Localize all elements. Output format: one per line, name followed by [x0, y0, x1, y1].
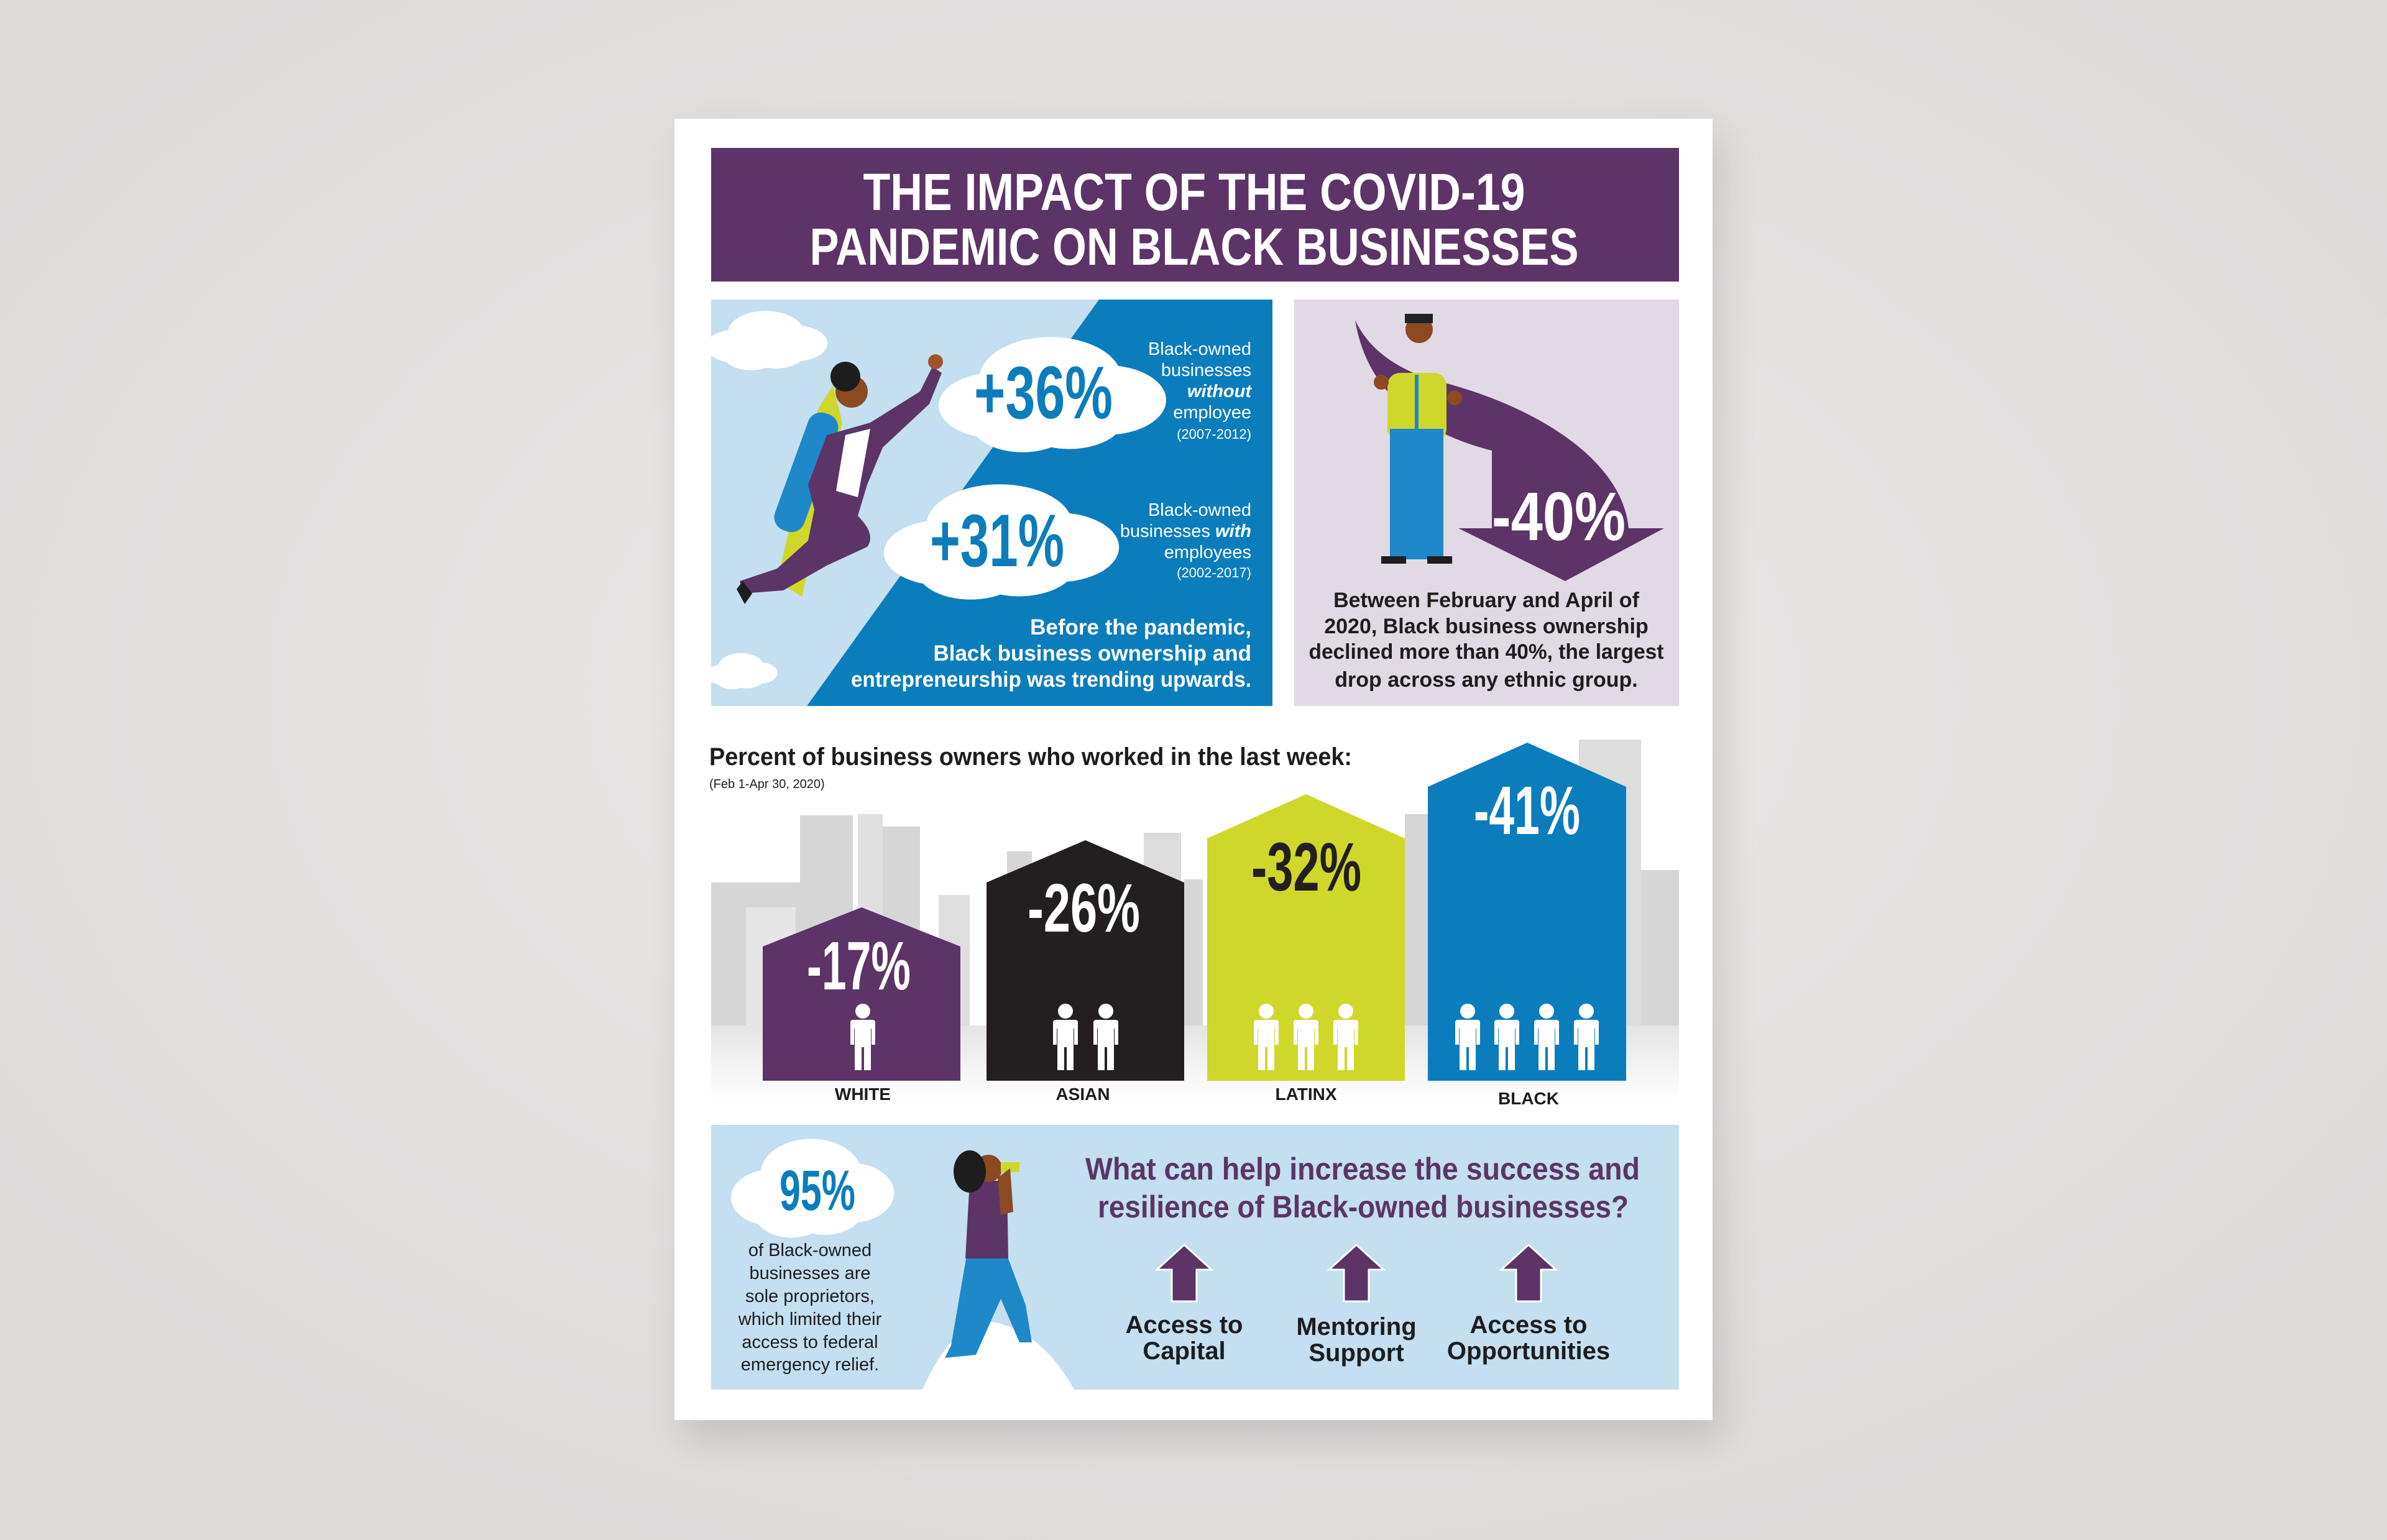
callout: +36% cloud [939, 337, 1166, 452]
chart heading: Percent of business owners who worked in the last week: [709, 743, 1352, 771]
bar: latinx -32% [1207, 794, 1405, 1104]
arrow: mentoring support: Mentoring [1296, 1313, 1417, 1341]
text: with employees: (2002-2017) [1177, 565, 1251, 580]
arrow: access to opportunities: Access to [1470, 1311, 1587, 1339]
panel: solutions [711, 1125, 1679, 1390]
card shadow [684, 134, 1722, 1439]
bar: black -41%: BLACK [1498, 1089, 1559, 1108]
text: before the pandemic: Black business ownership and [933, 641, 1251, 666]
callout: +31% cloud: +31% [930, 499, 1064, 582]
text: decline description: Between February and April of [1333, 589, 1640, 612]
text: without employee: without [1187, 382, 1252, 401]
chart heading: (Feb 1-Apr 30, 2020) [709, 777, 825, 791]
text: decline description: declined more than 40%, the largest [1309, 640, 1663, 664]
text: without employee: businesses [1161, 360, 1251, 380]
text: before the pandemic: Before the pandemic, [1030, 615, 1251, 639]
icon: small clouds [706, 311, 827, 689]
chart heading [709, 743, 1352, 791]
text: sole proprietors [738, 1240, 882, 1375]
text: before the pandemic [851, 615, 1251, 692]
arrow: access to opportunities: Opportunities [1447, 1337, 1610, 1365]
callout: +36% cloud: +36% [974, 351, 1113, 434]
arrow: access to capital: Capital [1143, 1337, 1226, 1365]
text: without employee [1148, 339, 1252, 442]
heading: question: What can help increase the success and [1085, 1152, 1640, 1186]
bar: white -17% [763, 907, 960, 1104]
arrow: access to capital: Access to [1126, 1311, 1243, 1339]
bar: white -17%: -17% [807, 928, 911, 1004]
title banner [711, 148, 1679, 282]
arrow: mentoring support: Support [1308, 1339, 1404, 1367]
text: decline description [1309, 589, 1663, 692]
callout: 95% cloud: 95% [780, 1159, 855, 1222]
text: sole proprietors: sole proprietors, [745, 1286, 875, 1306]
bar: latinx -32%: -32% [1251, 829, 1361, 905]
arrow: mentoring support [1296, 1245, 1417, 1367]
skyline background [711, 740, 1679, 1052]
panel: pre-pandemic growth [706, 300, 1272, 706]
text: with employees: Black-owned [1148, 500, 1251, 520]
text: with employees: businesses with [1120, 521, 1251, 541]
title banner: PANDEMIC ON BLACK BUSINESSES [809, 218, 1579, 276]
arrow: access to capital [1126, 1245, 1243, 1365]
bar: white -17%: WHITE [835, 1084, 891, 1104]
chart: house bars [711, 740, 1679, 1108]
illustration: jetpack woman [737, 354, 943, 604]
text: sole proprietors: of Black-owned [748, 1240, 872, 1260]
title banner: THE IMPACT OF THE COVID-19 [863, 163, 1525, 221]
text: with employees: employees [1164, 543, 1251, 562]
text: sole proprietors: emergency relief. [741, 1355, 879, 1375]
text: without employee: employee [1173, 403, 1251, 423]
illustration: man with downward arrow [1355, 314, 1664, 581]
text: decline description: drop across any ethnic group. [1335, 668, 1638, 692]
heading: question: resilience of Black-owned businesses? [1098, 1189, 1629, 1224]
text: decline description: 2020, Black business ownership [1324, 615, 1649, 638]
illustration: woman with binoculars on hill [922, 1150, 1074, 1390]
text: sole proprietors: which limited their [738, 1309, 882, 1329]
heading: question [1085, 1152, 1640, 1224]
text: sole proprietors: businesses are [749, 1263, 871, 1283]
bar: asian -26% [987, 840, 1184, 1104]
bar: black -41%: -41% [1474, 772, 1580, 849]
panel: -40% decline: -40% [1492, 479, 1626, 555]
callout: 95% cloud [731, 1139, 894, 1238]
callout: +31% cloud [884, 484, 1119, 600]
bar: latinx -32%: LATINX [1275, 1084, 1337, 1104]
text: with employees [1120, 500, 1251, 580]
bar: asian -26%: -26% [1028, 870, 1140, 946]
arrow: access to opportunities [1447, 1245, 1610, 1365]
bar: black -41% [1428, 743, 1626, 1108]
bar: asian -26%: ASIAN [1056, 1084, 1110, 1104]
white card [674, 119, 1713, 1420]
text: before the pandemic: entrepreneurship was trending upwards. [851, 667, 1251, 692]
text: without employee: Black-owned [1148, 339, 1251, 359]
panel: -40% decline [1294, 300, 1679, 706]
text: sole proprietors: access to federal [742, 1332, 878, 1352]
text: without employee: (2007-2012) [1177, 426, 1251, 442]
